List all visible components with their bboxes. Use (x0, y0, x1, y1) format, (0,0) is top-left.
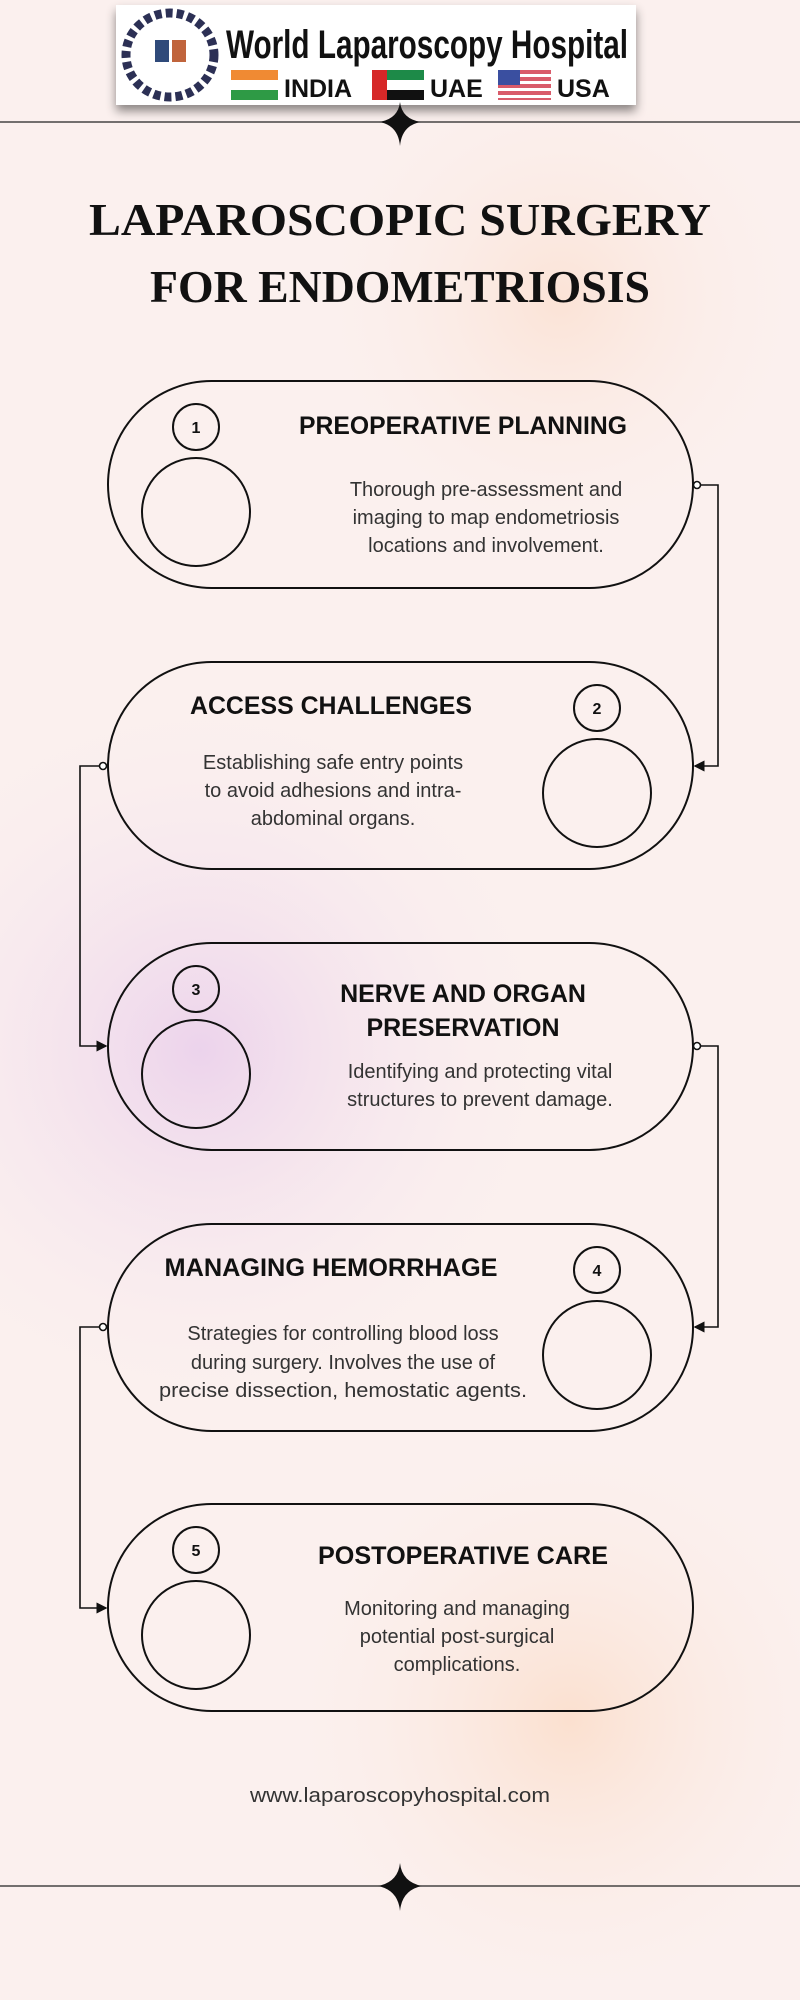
panel: step 2: to avoid adhesions and intra- (205, 780, 461, 802)
panel: step 2: 2 (593, 701, 602, 718)
title (89, 194, 711, 312)
panel: step 5: POSTOPERATIVE CARE (318, 1542, 608, 1570)
panel: step 4: 4 (593, 1263, 602, 1280)
panel: step 5 (108, 1504, 693, 1711)
flags and countries: INDIA (284, 75, 352, 103)
logo (116, 5, 636, 105)
panel: step 4: precise dissection, hemostatic agents. (159, 1380, 527, 1402)
panel: step 4: MANAGING HEMORRHAGE (164, 1254, 498, 1282)
panel: step 1: imaging to map endometriosis (353, 507, 619, 529)
flags and countries: UAE (430, 75, 483, 103)
panel: step 1: PREOPERATIVE PLANNING (299, 412, 627, 440)
panel: step 1: Thorough pre-assessment and (350, 479, 622, 501)
panel: step 1: 1 (192, 420, 201, 437)
panel: step 2: abdominal organs. (251, 808, 415, 830)
panel: step 1: locations and involvement. (368, 535, 604, 557)
panel: step 5: complications. (394, 1654, 520, 1676)
panel: step 5: 5 (192, 1543, 201, 1560)
icon: star bottom (378, 1863, 422, 1911)
panel: step 2: ACCESS CHALLENGES (190, 692, 472, 720)
icon: star top (379, 102, 421, 146)
title: FOR ENDOMETRIOSIS (150, 261, 650, 312)
panel: step 3 (108, 943, 693, 1150)
title: LAPAROSCOPIC SURGERY (89, 194, 711, 245)
panel: step 4: Strategies for controlling blood loss (187, 1323, 499, 1345)
panel: step 3: Identifying and protecting vital (348, 1061, 612, 1083)
panel: step 1 (108, 381, 693, 588)
panel: step 3: PRESERVATION (366, 1014, 560, 1042)
logo: World Laparoscopy Hospital (226, 23, 628, 67)
panel: step 3: NERVE AND ORGAN (340, 980, 586, 1008)
panel: step 2: Establishing safe entry points (203, 752, 463, 774)
panel: step 5: potential post-surgical (360, 1626, 554, 1648)
flags and countries: USA (557, 75, 610, 103)
panel: step 4 (108, 1224, 693, 1431)
connector arrows (80, 482, 718, 1608)
panel: step 5: Monitoring and managing (344, 1598, 570, 1620)
icon: laurel emblem (126, 13, 214, 97)
panel: step 3: 3 (192, 982, 201, 999)
flags and countries (231, 70, 610, 103)
panel: step 4: during surgery. Involves the use of (191, 1352, 496, 1374)
panel: step 2 (108, 662, 693, 869)
footer url: www.laparoscopyhospital.com (249, 1785, 550, 1807)
panel: step 3: structures to prevent damage. (347, 1089, 613, 1111)
